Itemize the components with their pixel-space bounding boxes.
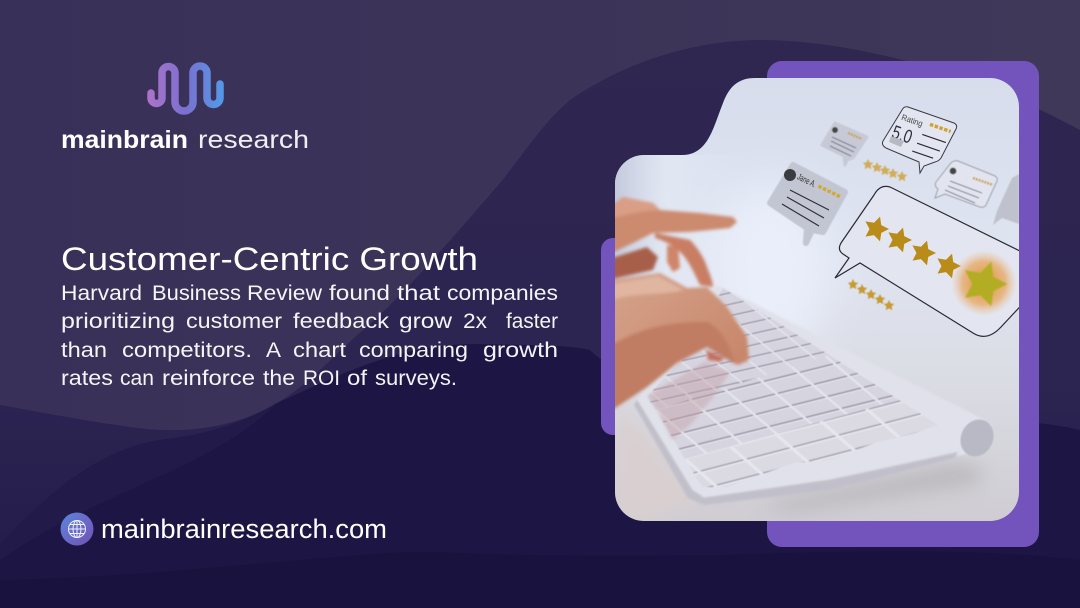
star row: lower bbox=[848, 279, 894, 310]
body text block: comparing bbox=[359, 338, 468, 362]
star 5 highlighted bbox=[964, 262, 1008, 307]
star 4 bbox=[938, 254, 961, 278]
keyboard keys bbox=[648, 288, 921, 488]
body text block: competitors. bbox=[122, 338, 252, 362]
body text block: Review bbox=[247, 281, 322, 305]
star 5 glow bbox=[951, 250, 1017, 316]
panel: purple backing left bbox=[601, 238, 661, 435]
logo wordmark: research bbox=[198, 126, 309, 154]
body text block: chart bbox=[293, 338, 346, 362]
body text block bbox=[61, 281, 558, 390]
fingertip tint on keys bbox=[648, 362, 730, 440]
body text block: feedback bbox=[293, 309, 389, 333]
body text block: faster bbox=[506, 309, 558, 333]
heading: Customer-Centric Growth bbox=[61, 241, 478, 277]
review bubble: rating 5.0: 5.0 bbox=[889, 122, 915, 148]
star row: upper bbox=[863, 159, 907, 181]
review bubble: right bbox=[935, 161, 997, 207]
logo icon: brain wave bbox=[151, 66, 220, 111]
finger pointing bbox=[612, 197, 737, 253]
fingertip red bbox=[706, 350, 724, 362]
website url: mainbrainresearch.com bbox=[101, 514, 387, 544]
body text block: companies bbox=[447, 281, 558, 305]
website link bbox=[60, 512, 387, 546]
review bubble: Jane A.: Jane A. bbox=[796, 172, 818, 189]
body text block: reinforce bbox=[162, 366, 255, 390]
body text block: surveys. bbox=[375, 366, 457, 390]
hand highlight bbox=[612, 276, 684, 300]
hands bbox=[612, 197, 749, 410]
lower hand bbox=[615, 271, 751, 366]
body text block: the bbox=[263, 366, 295, 390]
keyboard shadow bbox=[760, 462, 985, 512]
body text block: growth bbox=[483, 338, 558, 362]
review bubble: rating 5.0 bbox=[882, 107, 957, 173]
body text block: 2x bbox=[463, 309, 487, 333]
body text block: can bbox=[120, 366, 154, 390]
photo: hands typing with review bubbles bbox=[612, 78, 1030, 525]
body text block: customer bbox=[186, 309, 282, 333]
star 1 bbox=[866, 216, 889, 242]
body text block: prioritizing bbox=[61, 309, 175, 333]
body text block: than bbox=[61, 338, 107, 362]
keyboard end cap bbox=[960, 419, 994, 456]
body text block: of bbox=[347, 366, 367, 390]
body text block: rates bbox=[61, 366, 113, 390]
review bubble: far right bbox=[993, 174, 1019, 225]
keyboard bbox=[634, 280, 1000, 512]
body text block: Harvard bbox=[61, 281, 142, 305]
review bubble: large four plus one stars bbox=[835, 186, 1030, 336]
keyboard body bbox=[637, 285, 985, 498]
star 3 bbox=[912, 240, 936, 266]
body text block: Business bbox=[152, 281, 241, 305]
body text block: found bbox=[329, 281, 390, 305]
stub finger bbox=[667, 245, 680, 272]
logo wordmark bbox=[61, 126, 309, 154]
icon: globe bbox=[60, 512, 94, 546]
hand shading bbox=[612, 322, 735, 410]
logo wordmark: mainbrain bbox=[61, 126, 188, 154]
body text block: grow bbox=[399, 309, 453, 333]
body text block: ROI bbox=[303, 366, 340, 390]
star 2 bbox=[888, 228, 912, 252]
body text block: A bbox=[266, 338, 282, 362]
logo: mainbrain research bbox=[61, 66, 309, 154]
review bubble: Jane A. bbox=[770, 165, 845, 243]
curled finger bbox=[612, 247, 658, 279]
body text block: that bbox=[397, 281, 440, 305]
review bubble: small top bbox=[822, 123, 867, 165]
review bubble: rating 5.0: Rating bbox=[900, 112, 925, 129]
second finger bbox=[655, 233, 713, 287]
panel: purple backing right bbox=[767, 61, 1039, 547]
